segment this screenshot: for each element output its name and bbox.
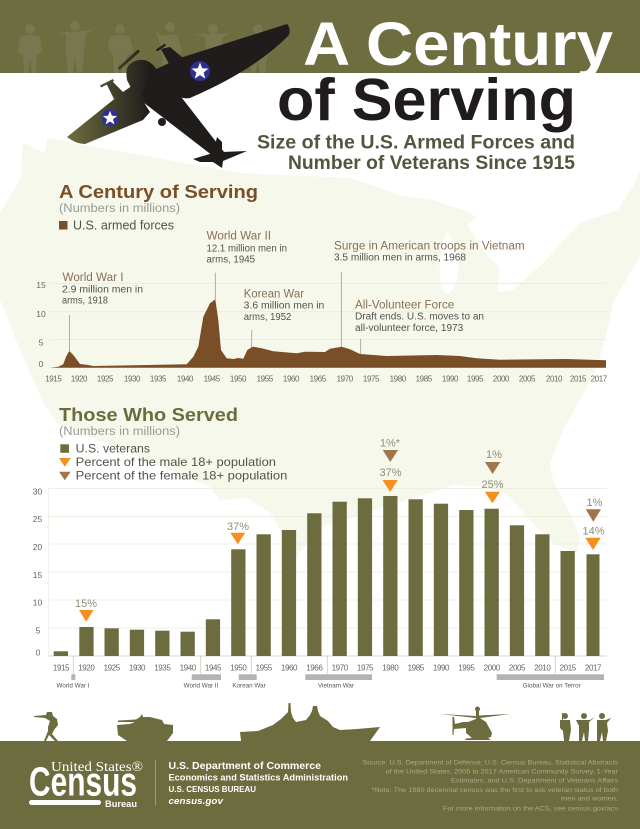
percent markers (75, 438, 605, 622)
y axis labels: 15 (36, 280, 46, 290)
x axis years: 2000 (493, 374, 510, 384)
icon: airplane (67, 24, 290, 168)
war era bars (71, 674, 604, 680)
x axis years: 1985 (408, 663, 425, 672)
legend: U.S. veterans (76, 441, 150, 455)
y axis labels: 20 (33, 542, 42, 552)
panel: armed forces chart (36, 182, 608, 384)
source notes: Estimates; and U.S. Department of Veterans Affairs (451, 778, 619, 784)
x axis years: 1915 (53, 663, 70, 672)
source notes: *Note: The 1980 decennial census was the first to ask veteran status of both (371, 787, 618, 794)
x axis years: 1995 (458, 663, 475, 672)
1980 markers: 37% (379, 467, 402, 479)
area chart (50, 299, 606, 368)
y axis labels: 5 (36, 626, 41, 636)
1920 male marker: 15% (75, 598, 97, 610)
icon: tank (117, 714, 173, 741)
y axis labels: 25 (33, 514, 42, 524)
right wing (142, 24, 290, 108)
x axis years (45, 374, 608, 384)
x axis years: 1960 (281, 663, 298, 672)
war era labels (57, 682, 581, 690)
x axis years: 1920 (71, 374, 88, 384)
x axis years: 1955 (256, 663, 273, 672)
legend: Percent of the male 18+ population (76, 455, 276, 469)
2017 markers: 1% (587, 497, 603, 509)
annotation: Korean War: 3.6 million men in (244, 300, 324, 311)
1950 male marker (227, 521, 249, 544)
icon: helicopter (440, 707, 510, 740)
icon: three soldiers (560, 713, 611, 741)
x axis years: 1980 (390, 374, 407, 384)
ghost soldiers in header (18, 21, 268, 73)
annotation: Vietnam surge: Surge in American troops in Vietnam (334, 240, 525, 252)
x axis years: 2005 (509, 663, 526, 672)
Department text: Economics and Statistics Administration (168, 772, 348, 784)
x axis years: 1960 (283, 374, 300, 384)
title: A Century (303, 10, 613, 78)
x axis years: 1995 (467, 374, 484, 384)
annotation: All-Volunteer Force: Draft ends. U.S. moves to an (355, 312, 484, 323)
right engine (156, 44, 183, 64)
left engine (100, 79, 124, 99)
annotation: Vietnam surge (334, 240, 525, 264)
tail (193, 137, 247, 168)
heading: A Century of Serving (59, 182, 258, 202)
1950 male marker: 37% (227, 521, 249, 533)
x axis years: 2015 (570, 374, 587, 384)
war era labels: Korean War (232, 682, 266, 690)
legend: Percent of the female 18+ population (76, 469, 287, 483)
legend: U.S. armed forces (73, 218, 174, 232)
x axis years: 1945 (205, 663, 222, 672)
icon: ship (240, 703, 380, 741)
x axis years: 1970 (332, 663, 349, 672)
title: of Serving (277, 67, 576, 133)
propeller (118, 50, 140, 70)
x axis years: 2000 (484, 663, 501, 672)
x axis years: 1975 (357, 663, 374, 672)
annotation: Korean War: Korean War (244, 288, 304, 300)
war era labels: World War I (57, 682, 90, 690)
annotation: Vietnam surge: 3.5 million men in arms, 1968 (334, 253, 466, 264)
x axis years: 2010 (534, 663, 551, 672)
x axis years: 1915 (45, 374, 62, 384)
x axis years: 1935 (154, 663, 171, 672)
roundel right (190, 61, 210, 81)
x axis years: 1930 (129, 663, 146, 672)
war era labels: Vietnam War (318, 682, 354, 690)
war era labels: Global War on Terror (523, 682, 581, 690)
x axis years (53, 663, 602, 672)
x axis years: 1950 (230, 374, 247, 384)
x axis years: 1975 (363, 374, 380, 384)
panel: veterans chart (33, 405, 607, 690)
header band (0, 0, 640, 73)
1980 markers: 1%* (380, 438, 401, 450)
source notes (362, 760, 619, 812)
source notes: For more information on the ACS, see census.gov/acs (443, 806, 619, 812)
annotation: World War II (206, 231, 287, 266)
x axis years: 2010 (546, 374, 563, 384)
x axis years: 1945 (204, 374, 221, 384)
legend (59, 441, 287, 483)
x axis years: 1925 (97, 374, 114, 384)
annotation: World War I: 2.9 million men in (62, 284, 143, 295)
background map of the United States (0, 138, 640, 557)
annotation: Korean War (244, 288, 324, 323)
title (277, 10, 613, 133)
subtitle: Number of Veterans Since 1915 (288, 153, 575, 174)
x axis years: 1955 (257, 374, 274, 384)
footer band (0, 741, 640, 829)
Department text: U.S. Department of Commerce (168, 760, 321, 772)
x axis years: 2017 (591, 374, 608, 384)
y axis labels: 10 (36, 309, 46, 319)
icon: soldier aiming (34, 712, 58, 741)
subtitle (257, 132, 575, 174)
units note: (Numbers in millions) (59, 203, 180, 215)
Census Bureau logo: United States® (51, 760, 143, 775)
units note: (Numbers in millions) (59, 426, 180, 438)
y axis labels: 0 (36, 648, 41, 658)
2017 markers (582, 497, 605, 550)
2000 markers (481, 449, 504, 503)
Department text (168, 760, 348, 807)
y axis labels: 5 (39, 338, 44, 348)
1920 male marker (75, 598, 97, 622)
x axis years: 1935 (150, 374, 167, 384)
roundel left (102, 110, 118, 126)
y axis labels: 15 (33, 570, 42, 580)
y axis labels (33, 486, 42, 658)
source notes: Source: U.S. Department of Defense; U.S. Census Bureau, Statistical Abstracts (362, 760, 619, 766)
x axis years: 1970 (337, 374, 354, 384)
annotation: Korean War: arms, 1952 (244, 312, 292, 323)
annotation: World War II: arms, 1945 (206, 255, 255, 266)
left wing (67, 85, 150, 144)
annotation: World War I (62, 272, 143, 307)
Department text: U.S. CENSUS BUREAU (168, 784, 256, 794)
annotation: World War II: World War II (206, 231, 271, 243)
war era labels: World War II (184, 682, 219, 690)
heading: Those Who Served (59, 405, 238, 425)
annotation: All-Volunteer Force: all-volunteer force, 1973 (355, 323, 464, 334)
y axis labels: 10 (33, 598, 42, 608)
annotation: World War I: arms, 1918 (62, 296, 108, 307)
x axis years: 1940 (180, 663, 197, 672)
x axis years: 1990 (442, 374, 459, 384)
source notes: of the United States, 2005 to 2017 American Community Survey, 1-Year (386, 768, 619, 776)
x axis years: 1966 (306, 663, 323, 672)
annotation: World War II: 12.1 million men in (206, 243, 287, 254)
subtitle: Size of the U.S. Armed Forces and (257, 132, 575, 154)
y axis labels: 0 (39, 359, 44, 369)
x axis years: 1930 (124, 374, 141, 384)
2000 markers: 25% (481, 479, 504, 491)
2000 markers: 1% (486, 449, 502, 461)
x axis years: 2017 (585, 663, 602, 672)
x axis years: 1925 (104, 663, 121, 672)
annotation: World War I: World War I (62, 272, 124, 284)
Department text: census.gov (168, 796, 224, 807)
y axis labels (36, 280, 46, 369)
2017 markers: 14% (582, 526, 605, 538)
annotation: All-Volunteer Force: All-Volunteer Force (355, 300, 454, 312)
annotation: All-Volunteer Force (355, 300, 484, 334)
x axis years: 1920 (78, 663, 95, 672)
bar chart (54, 496, 599, 656)
annotation leader lines (70, 272, 361, 354)
x axis years: 2005 (519, 374, 536, 384)
landing wheel (158, 118, 166, 126)
era separators (73, 656, 555, 674)
y axis labels: 30 (33, 486, 42, 496)
Census Bureau logo: Bureau (105, 799, 137, 809)
x axis years: 1980 (382, 663, 399, 672)
1980 markers (379, 438, 402, 492)
Census Bureau logo: Census (29, 758, 137, 804)
x axis years: 1990 (433, 663, 450, 672)
fuselage (126, 60, 224, 156)
x axis years: 1985 (416, 374, 433, 384)
x axis years: 2015 (560, 663, 577, 672)
x axis years: 1940 (177, 374, 194, 384)
source notes: men and women. (561, 796, 618, 802)
x axis years: 1965 (310, 374, 327, 384)
x axis years: 1950 (230, 663, 247, 672)
